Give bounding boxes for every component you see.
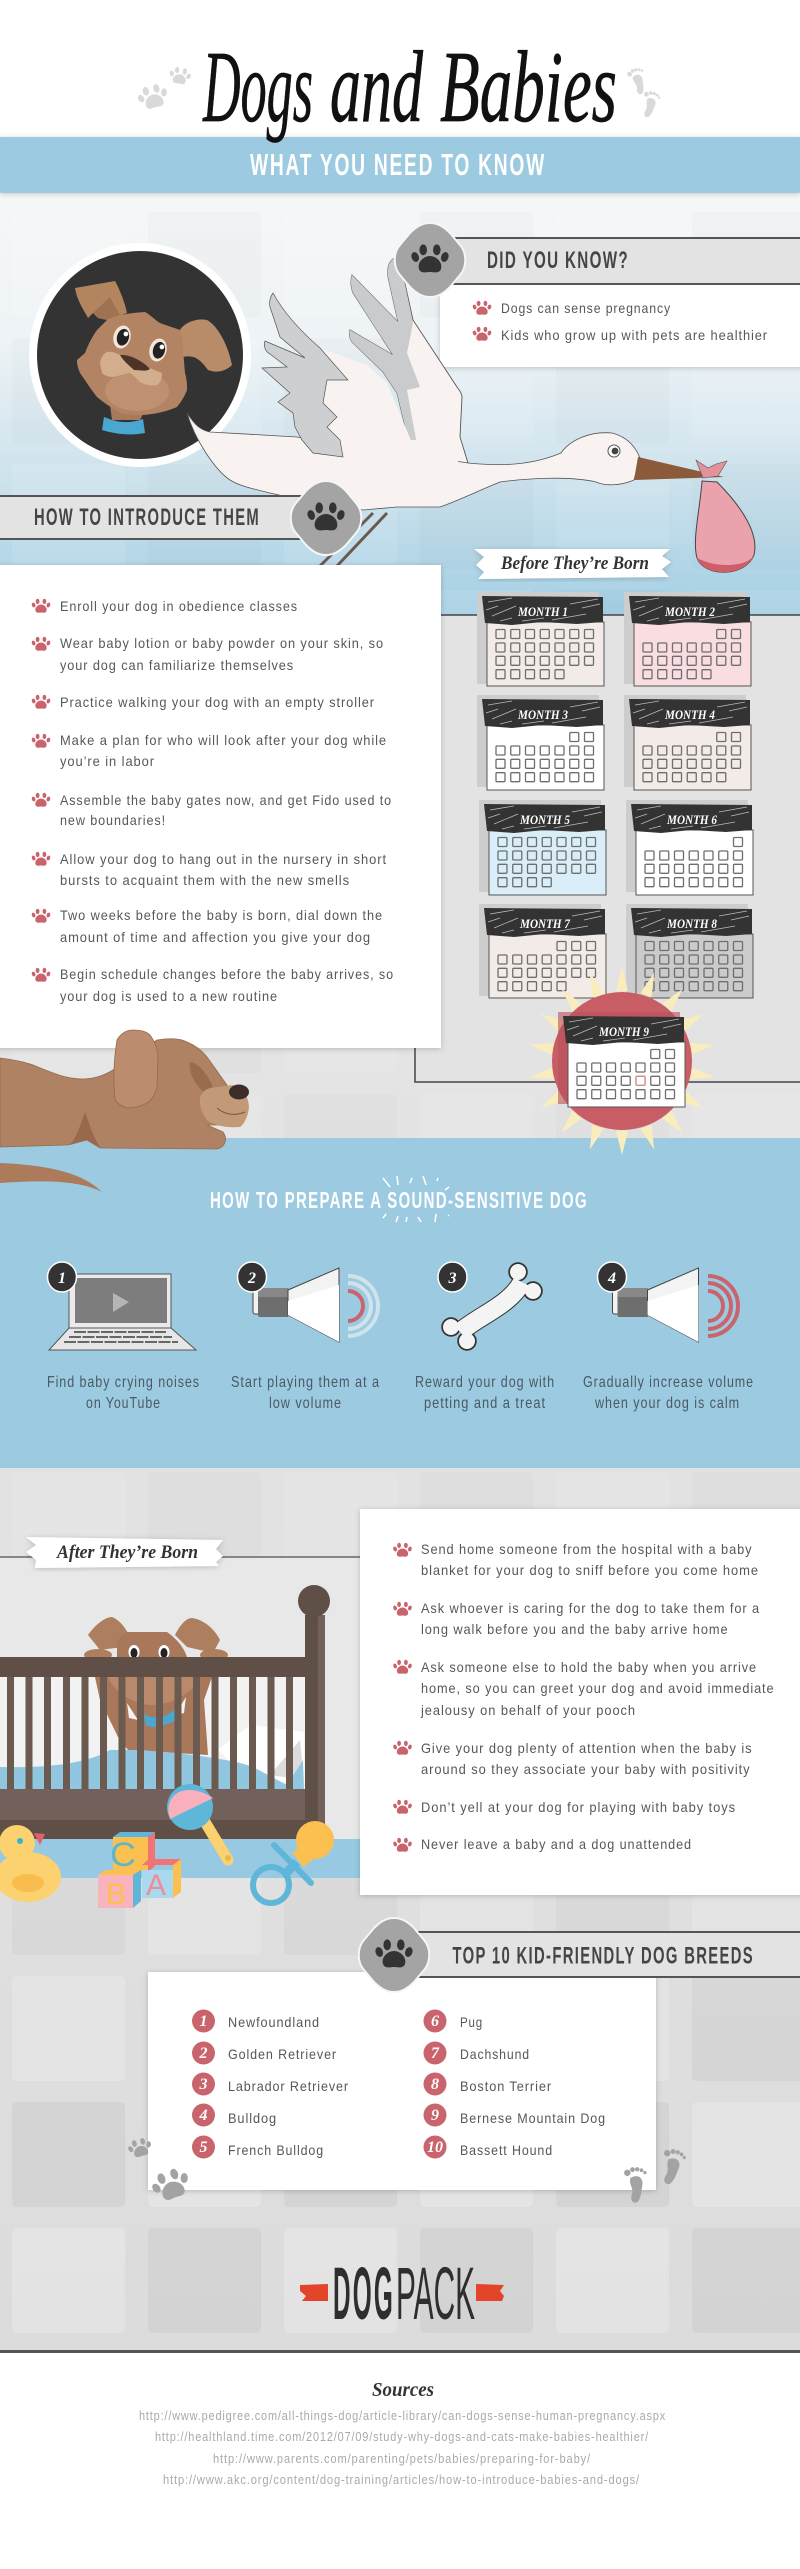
caption step 4	[583, 1374, 754, 1412]
panel: top 10 breeds card	[148, 1972, 656, 2190]
toy: rubber duck	[0, 1825, 61, 1902]
grey lower background	[0, 615, 800, 2352]
calendar: month 1	[477, 592, 604, 686]
calendar: month 6	[626, 800, 753, 895]
breeds column two: Pug	[460, 2014, 483, 2030]
sources urls: http://www.parents.com/parenting/pets/babies/preparing-for-baby/	[213, 2451, 591, 2466]
icon: paw badge how to introduce	[291, 481, 361, 555]
panel: months background	[415, 615, 800, 1082]
subtitle band: WHAT YOU NEED TO KNOW	[250, 147, 546, 182]
sources urls: http://www.akc.org/content/dog-training/articles/how-to-introduce-babies-and-dogs/	[163, 2472, 640, 2487]
blue section sound-sensitive	[0, 1138, 800, 1468]
dog body	[0, 1039, 232, 1149]
dog eye patch	[190, 1062, 213, 1092]
breeds column one: Labrador Retriever	[228, 2078, 349, 2094]
caption step 1: on YouTube	[86, 1395, 161, 1412]
neck	[110, 405, 145, 420]
ribbon: before they're born	[474, 549, 671, 579]
did you know header band	[440, 238, 800, 284]
list text: Practice walking your dog with an empty stroller	[60, 694, 375, 710]
nose	[120, 355, 150, 371]
crib post	[305, 1615, 325, 1839]
body	[187, 413, 640, 510]
list text	[393, 1541, 774, 1852]
list text: long walk before you and the baby arrive home	[421, 1621, 728, 1637]
breeds column one: 2	[198, 2045, 208, 2062]
calendar: month 5: MONTH 5	[519, 812, 570, 827]
dog head and paws	[117, 1632, 187, 1680]
illustration: stork with bundle	[187, 259, 755, 572]
illustration: crib with dog	[0, 1585, 330, 1839]
muzzle	[100, 352, 162, 385]
list text: Make a plan for who will look after your dog while	[60, 732, 387, 748]
card	[360, 1509, 800, 1895]
facts list: Kids who grow up with pets are healthier	[501, 327, 768, 343]
breeds column two: 8	[431, 2076, 439, 2093]
list text: your dog is used to a new routine	[60, 988, 278, 1004]
list text: home, so you can greet your dog and avoid immediate	[421, 1680, 774, 1696]
right wing	[349, 259, 468, 466]
illustration: dog portrait	[29, 243, 251, 467]
breeds column one: French Bulldog	[228, 2142, 324, 2158]
crib rails	[0, 1657, 305, 1677]
list text: Two weeks before the baby is born, dial down the	[60, 907, 383, 923]
blanket	[0, 1750, 304, 1790]
dog eyes	[128, 1645, 170, 1659]
card	[0, 565, 441, 1048]
icon: paw badge did you know	[395, 223, 465, 297]
icon: paw badge top 10	[359, 1918, 429, 1992]
list text: new boundaries!	[60, 812, 166, 828]
calendar: month 5	[479, 800, 606, 895]
breeds column one: 5	[200, 2139, 208, 2156]
list text: Don’t yell at your dog for playing with baby toys	[421, 1799, 736, 1815]
title: and	[330, 31, 424, 144]
list text: Wear baby lotion or baby powder on your skin, so	[60, 635, 384, 651]
calendar: month 9	[558, 1012, 685, 1107]
step 1: laptop	[48, 1262, 196, 1350]
breeds column two: Bernese Mountain Dog	[460, 2110, 606, 2126]
jaw	[105, 371, 169, 411]
logo: dogpack: DOG	[333, 2252, 395, 2335]
icon: dog paw prints	[135, 66, 193, 111]
dog collar	[144, 1710, 176, 1727]
list text: Enroll your dog in obedience classes	[60, 598, 298, 614]
logo: dogpack: PACK	[396, 2252, 475, 2335]
calendar: month 4	[624, 695, 751, 790]
toy: alphabet blocks	[98, 1832, 181, 1911]
footer rule	[0, 2350, 800, 2353]
step 4: speaker louder: 4	[607, 1270, 616, 1287]
toy: alphabet blocks: B	[106, 1878, 126, 1911]
mattress background	[0, 1677, 305, 1790]
right wing grey feathers	[349, 259, 420, 460]
list text: Assemble the baby gates now, and get Fido used to	[60, 792, 392, 808]
list text: Begin schedule changes before the baby arrives, so	[60, 966, 394, 982]
caption step 3: Reward your dog with	[415, 1374, 555, 1391]
how to introduce header band: HOW TO INTRODUCE THEM	[34, 504, 260, 531]
breeds column one: Bulldog	[228, 2110, 277, 2126]
list text: Send home someone from the hospital with a baby	[421, 1541, 752, 1557]
sources title: Sources	[372, 2379, 434, 2401]
breeds column one: 4	[198, 2107, 208, 2124]
calendar: month 6: MONTH 6	[666, 812, 717, 827]
did you know header band: DID YOU KNOW?	[487, 247, 629, 274]
title: Dogs	[202, 31, 313, 144]
icon: paw prints breeds	[126, 2136, 194, 2204]
dog ears	[88, 1617, 128, 1650]
calendar: month 7	[479, 904, 606, 998]
step 3: bone: 3	[448, 1270, 456, 1287]
sources urls: http://healthland.time.com/2012/07/09/study-why-dogs-and-cats-make-babies-healthier/	[155, 2429, 649, 2444]
calendar: month 8	[626, 904, 753, 998]
title	[202, 31, 617, 144]
bundle	[695, 481, 755, 572]
subtitle band	[0, 137, 800, 193]
dog muzzle and nose	[200, 1085, 249, 1127]
breeds column two: Bassett Hound	[460, 2142, 553, 2158]
stork legs	[320, 513, 387, 566]
breeds column two: 9	[431, 2107, 439, 2124]
breeds column two: 6	[431, 2013, 439, 2030]
ribbon: before they're born: Before They’re Born	[500, 553, 649, 574]
toy: rattle	[167, 1784, 231, 1861]
sources urls: http://www.pedigree.com/all-things-dog/article-library/can-dogs-sense-human-pregnancy.aspx	[139, 2408, 666, 2423]
eyes	[111, 323, 133, 351]
list text: Never leave a baby and a dog unattended	[421, 1836, 692, 1852]
step 1: laptop: 1	[58, 1270, 66, 1287]
title: Babies	[440, 31, 617, 144]
list text: around so they associate your baby with positivity	[421, 1761, 750, 1777]
step 2: speaker low volume	[238, 1262, 378, 1342]
caption step 3: petting and a treat	[424, 1395, 546, 1412]
calendar: month 7: MONTH 7	[519, 916, 570, 931]
icon: baby footprints	[626, 66, 661, 119]
dog ear	[114, 1030, 158, 1108]
toy: alphabet blocks: C	[110, 1836, 136, 1874]
caption step 2: Start playing them at a	[231, 1374, 380, 1391]
panel: did you know	[440, 238, 800, 367]
caption step 2: low volume	[269, 1395, 342, 1412]
did you know card	[440, 284, 800, 367]
eye	[608, 445, 620, 457]
caption step 1: Find baby crying noises	[47, 1374, 200, 1391]
toy: alphabet blocks: A	[146, 1869, 166, 1902]
calendar: month 4: MONTH 4	[664, 707, 715, 722]
heading: sound-sensitive	[210, 1176, 588, 1222]
breeds column one: Newfoundland	[228, 2014, 320, 2030]
toy: pacifier	[253, 1821, 334, 1903]
calendar: month 8: MONTH 8	[666, 916, 717, 931]
list text: blanket for your dog to sniff before you come home	[421, 1562, 759, 1578]
caption step 3	[415, 1374, 555, 1412]
caption step 2	[231, 1374, 380, 1412]
icon: baby footprints breeds	[624, 2148, 687, 2203]
caption step 4: when your dog is calm	[594, 1395, 740, 1412]
caption step 4: Gradually increase volume	[583, 1374, 754, 1391]
left wing	[262, 293, 420, 466]
heading: sound-sensitive: HOW TO PREPARE A SOUND-SENSITIVE DOG	[210, 1187, 588, 1213]
crib bars	[7, 1677, 293, 1790]
step 3: bone	[438, 1262, 542, 1350]
pillow	[218, 1725, 304, 1785]
step 2: speaker low volume: 2	[247, 1270, 256, 1287]
sources urls	[139, 2408, 666, 2487]
left ear	[75, 281, 127, 320]
ribbon: after they're born: After They’re Born	[56, 1542, 198, 1563]
ribbon: after they're born	[26, 1537, 223, 1568]
panel: how to introduce list	[0, 565, 441, 1048]
calendar: month 1: MONTH 1	[517, 604, 568, 619]
facts list	[472, 300, 768, 343]
list text: Give your dog plenty of attention when the baby is	[421, 1740, 752, 1756]
right ear	[180, 319, 232, 372]
calendar: month 2: MONTH 2	[664, 604, 715, 619]
how to introduce header band	[0, 496, 310, 539]
illustration: sleeping dog	[0, 1030, 249, 1149]
list text: you’re in labor	[60, 753, 155, 769]
list text: jealousy on behalf of your pooch	[420, 1702, 636, 1718]
breeds column two: Dachshund	[460, 2046, 530, 2062]
list text: Ask whoever is caring for the dog to take them for a	[421, 1600, 760, 1616]
collar	[102, 417, 145, 434]
breeds column one: 3	[198, 2076, 208, 2093]
top gradient background	[0, 193, 800, 615]
caption step 1	[47, 1374, 200, 1412]
beak	[634, 457, 724, 480]
facts list: Dogs can sense pregnancy	[501, 300, 671, 316]
list text: Ask someone else to hold the baby when you arrive	[421, 1659, 757, 1675]
list text: bursts to acquaint them with the new smells	[60, 872, 350, 888]
calendar: month 2	[624, 592, 751, 686]
breeds column one	[192, 2010, 349, 2158]
list text: Allow your dog to hang out in the nursery in short	[60, 851, 387, 867]
panel: after they're born list	[360, 1509, 800, 1895]
top 10 header band	[394, 1932, 800, 1977]
list text: amount of time and affection you give your dog	[60, 929, 371, 945]
breeds column one: 1	[200, 2013, 208, 2030]
list text	[31, 598, 394, 1004]
list text: your dog can familiarize themselves	[60, 657, 294, 673]
breeds column two: Boston Terrier	[460, 2078, 552, 2094]
breeds column two: 7	[431, 2045, 440, 2062]
breeds column two: 10	[427, 2139, 443, 2156]
calendar: month 3: MONTH 3	[517, 707, 568, 722]
step 4: speaker louder	[598, 1262, 738, 1342]
dog tail	[0, 1163, 102, 1192]
breeds column two	[424, 2010, 606, 2158]
sun burst behind month 9	[528, 967, 716, 1155]
head	[77, 312, 187, 415]
calendar: month 3	[477, 695, 604, 790]
calendar: month 9: MONTH 9	[598, 1024, 649, 1039]
dog body	[95, 1677, 212, 1755]
panel: nursery backdrop	[0, 1557, 365, 1878]
breeds column one: Golden Retriever	[228, 2046, 337, 2062]
sources	[139, 2379, 666, 2487]
